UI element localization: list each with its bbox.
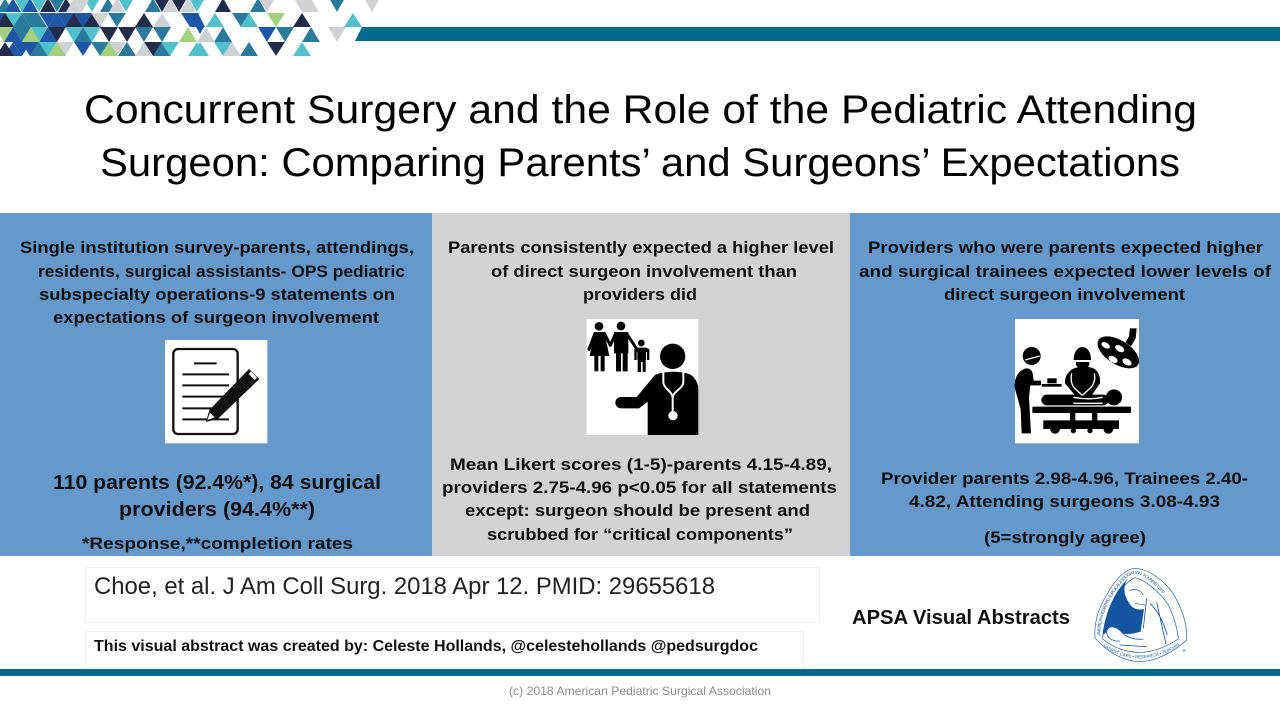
provider scores text: 4.82, Attending surgeons 3.08-4.93 bbox=[909, 492, 1220, 511]
Likert results text: Mean Likert scores (1-5)-parents 4.15-4.89, bbox=[450, 455, 832, 474]
surgeon figure bbox=[1065, 347, 1100, 395]
provider finding text: direct surgeon involvement bbox=[944, 285, 1185, 304]
operating lamp bbox=[1092, 328, 1144, 375]
response counts: 110 parents (92.4%*), 84 surgical bbox=[53, 472, 381, 494]
APSA logo: AMERICAN PEDIATRIC SURGICAL ASSOCIATION · FOUNDED 1970 bbox=[1097, 570, 1165, 636]
title: Surgeon: Comparing Parents’ and Surgeons’ Expectations bbox=[100, 141, 1180, 185]
response counts: providers (94.4%**) bbox=[119, 499, 315, 521]
study description text: residents, surgical assistants- OPS pediatric bbox=[38, 262, 405, 281]
credit box bbox=[86, 632, 804, 668]
icon: family and doctor bbox=[587, 319, 698, 435]
provider scores text bbox=[881, 469, 1248, 511]
parents finding text: providers did bbox=[583, 285, 697, 304]
footer bar bbox=[0, 669, 1280, 676]
assistant figure bbox=[1015, 347, 1062, 433]
parents finding text: Parents consistently expected a higher level bbox=[448, 238, 834, 257]
header bar bbox=[355, 27, 1280, 41]
response counts bbox=[53, 472, 381, 521]
icon: document and pencil bbox=[165, 340, 267, 443]
study description text: expectations of surgeon involvement bbox=[53, 308, 379, 327]
Likert results text bbox=[442, 455, 837, 544]
credit box: This visual abstract was created by: Celeste Hollands, @celestehollands @pedsurgdoc bbox=[94, 638, 758, 655]
provider scores text: Provider parents 2.98-4.96, Trainees 2.40- bbox=[881, 469, 1248, 488]
title bbox=[84, 88, 1197, 185]
study description text: subspecialty operations-9 statements on bbox=[39, 285, 395, 304]
copyright footer: (c) 2018 American Pediatric Surgical Association bbox=[509, 684, 771, 698]
panel: study design bbox=[0, 213, 432, 556]
patient on table bbox=[1032, 389, 1131, 434]
APSA label: APSA Visual Abstracts bbox=[852, 607, 1070, 629]
provider finding text: Providers who were parents expected higher bbox=[868, 238, 1263, 257]
APSA logo: PATIENT CARE • RESEARCH • TEACHING bbox=[1103, 643, 1180, 658]
provider finding text: and surgical trainees expected lower levels of bbox=[859, 262, 1271, 281]
Likert results text: except: surgeon should be present and bbox=[465, 501, 810, 520]
Likert results text: providers 2.75-4.96 p<0.05 for all statements bbox=[442, 478, 837, 497]
panel: provider subgroups bbox=[850, 213, 1280, 556]
footnote: rates: *Response,**completion rates bbox=[82, 534, 353, 553]
study description text bbox=[20, 238, 414, 327]
Likert results text: scrubbed for “critical components” bbox=[487, 525, 793, 544]
scale note: (5=strongly agree) bbox=[984, 528, 1146, 547]
parents finding text bbox=[448, 238, 834, 304]
study description text: Single institution survey-parents, attendings, bbox=[20, 238, 414, 257]
parents finding text: of direct surgeon involvement than bbox=[491, 262, 797, 281]
title: Concurrent Surgery and the Role of the Pediatric Attending bbox=[84, 88, 1197, 132]
header triangle pattern bbox=[0, 0, 380, 56]
citation box bbox=[86, 568, 820, 622]
icon: operating room bbox=[1015, 319, 1144, 443]
citation box: Choe, et al. J Am Coll Surg. 2018 Apr 12. PMID: 29655618 bbox=[94, 573, 715, 600]
panel: parents vs providers bbox=[432, 213, 850, 556]
provider finding text bbox=[859, 238, 1271, 304]
APSA logo: ® bbox=[1183, 647, 1187, 653]
